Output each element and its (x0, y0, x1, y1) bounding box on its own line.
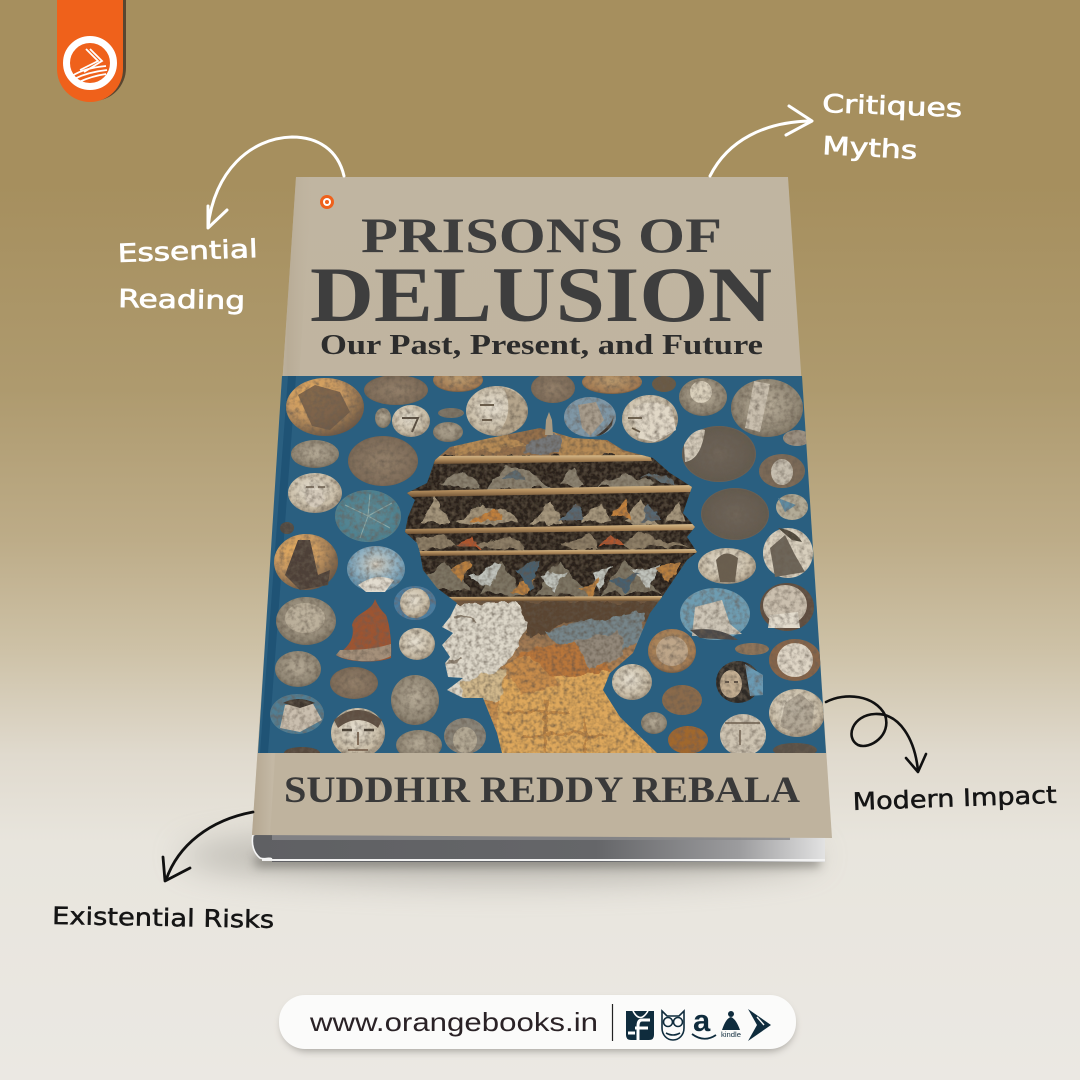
icon: kindle: kindle (721, 1030, 741, 1039)
arrow: critiques myths (710, 106, 812, 176)
icon: play store (748, 1009, 771, 1041)
pill body (279, 995, 796, 1049)
cap scenery (455, 432, 640, 456)
book title: DELUSION (310, 251, 772, 338)
publisher logo (66, 40, 114, 86)
arrow: essential reading (208, 137, 344, 228)
arrow: modern impact (826, 696, 926, 772)
book title (310, 207, 772, 361)
central head collage (405, 428, 697, 753)
tab shadow (60, 0, 126, 101)
label: modern impact: Modern Impact (852, 781, 1057, 816)
icon: goodreads owl (662, 1011, 684, 1040)
icon: amazon: a (693, 1003, 711, 1038)
pale face profile (436, 603, 528, 700)
orange tab (57, 0, 123, 102)
website url: www.orangebooks.in (309, 1007, 598, 1037)
right medallions (531, 370, 825, 757)
author name: SUDDHIR REDDY REBALA (284, 770, 800, 811)
label: essential reading: Essential (117, 234, 258, 268)
golden shelves (405, 455, 697, 601)
shelf scenes (440, 464, 655, 490)
icon: flipkart (626, 1011, 654, 1040)
pill shadow (282, 1001, 794, 1051)
floor shadow (180, 830, 820, 882)
spire on top of head (545, 412, 553, 435)
logo tab (57, 0, 126, 102)
icon: kindle (721, 1011, 741, 1039)
front cover (252, 177, 832, 838)
website pill (279, 995, 796, 1051)
publisher mark on cover (320, 195, 334, 209)
cover art (250, 368, 840, 763)
book title: PRISONS OF (361, 207, 722, 263)
label: essential reading: Reading (118, 284, 245, 315)
book (250, 177, 840, 862)
page block (252, 834, 825, 862)
spine hinge (252, 177, 312, 835)
label: essential reading (117, 234, 258, 315)
arrow: existential risks (163, 812, 253, 881)
left medallions (270, 368, 528, 760)
label: critiques myths: Myths (822, 131, 918, 165)
lower strata (515, 602, 660, 640)
label: critiques myths (822, 89, 963, 165)
spine crease on art (260, 376, 296, 753)
book title: Our Past, Present, and Future (320, 330, 763, 361)
label: critiques myths: Critiques (822, 89, 963, 123)
label: existential risks: Existential Risks (52, 902, 274, 934)
rust ship shape (336, 599, 391, 662)
